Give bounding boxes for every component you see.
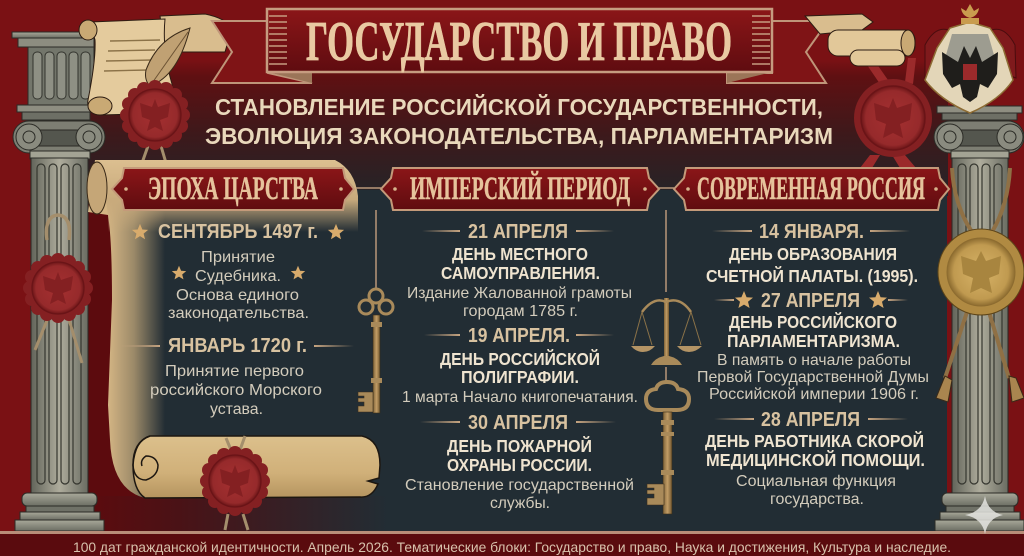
column 3 text: Современная Россия: 28 АПРЕЛЯ xyxy=(761,409,860,431)
column 2 text: Имперский период: 30 АПРЕЛЯ xyxy=(468,412,568,434)
column 3 text: Современная Россия: ДЕНЬ РАБОТНИКА СКОРОЙ xyxy=(705,430,924,451)
column 3 text: Современная Россия: 14 ЯНВАРЯ. xyxy=(759,221,864,243)
column 2 text: Имперский период xyxy=(402,221,638,512)
column 2 text: Имперский период: Становление государственной xyxy=(405,477,634,494)
seal on left column xyxy=(23,215,93,363)
footer strip xyxy=(0,531,1024,556)
column 1 text: Эпоха царства: Принятие первого xyxy=(165,363,304,380)
icon: sparkle watermark xyxy=(965,496,1003,534)
title ribbon xyxy=(212,9,828,83)
section banner: Эпоха царства xyxy=(112,168,354,210)
icon: scales of justice xyxy=(631,298,702,365)
wax seal right xyxy=(854,79,932,157)
footer strip: 100 дат гражданской идентичности. Апрель 2026. Тематические блоки: Государство и право, Наука и достижения, Культура и наследие. xyxy=(73,539,951,555)
wax seal on roll xyxy=(200,446,270,516)
column 2 text: Имперский период: САМОУПРАВЛЕНИЯ. xyxy=(441,263,600,283)
section banner: Имперский период xyxy=(381,168,659,210)
column 3 text: Современная Россия: ПАРЛАМЕНТАРИЗМА. xyxy=(727,331,900,351)
column 2 text: Имперский период: ДЕНЬ МЕСТНОГО xyxy=(452,244,588,264)
right column xyxy=(934,106,1024,532)
column 1 text: Эпоха царства: устава. xyxy=(210,401,263,418)
column 3 text: Современная Россия: МЕДИЦИНСКОЙ ПОМОЩИ. xyxy=(706,449,925,470)
top-left parchment with feather xyxy=(79,14,232,115)
section banner: Современная Россия xyxy=(674,168,949,210)
coat of arms crest xyxy=(925,4,1016,113)
column 3 text: Современная Россия xyxy=(697,221,929,508)
section banner: Эпоха царства: ЭПОХА ЦАРСТВА xyxy=(148,171,318,207)
icon: small key xyxy=(358,289,393,413)
column 1 text: Эпоха царства: СЕНТЯБРЬ 1497 г. xyxy=(158,221,318,243)
subtitle: ЭВОЛЮЦИЯ ЗАКОНОДАТЕЛЬСТВА, ПАРЛАМЕНТАРИЗМ xyxy=(205,123,833,149)
column 3 text: Современная Россия: ДЕНЬ ОБРАЗОВАНИЯ xyxy=(729,244,897,264)
connector lines xyxy=(356,188,674,382)
column 3 text: Современная Россия: СЧЕТНОЙ ПАЛАТЫ. (1995). xyxy=(706,265,918,286)
column 3 text: Современная Россия: ДЕНЬ РОССИЙСКОГО xyxy=(729,311,897,332)
column 3 text: Современная Россия: Социальная функция xyxy=(736,473,896,490)
section banner: Имперский период: ИМПЕРСКИЙ ПЕРИОД xyxy=(410,170,630,207)
title: ГОСУДАРСТВО И ПРАВО xyxy=(306,11,732,73)
column 2 text: Имперский период: 19 АПРЕЛЯ. xyxy=(468,325,570,347)
column 1 text: Эпоха царства: Судебника. xyxy=(195,268,281,285)
rope and tassels on right column xyxy=(936,168,1024,402)
column 3 text: Современная Россия: Российской империи 1906 г. xyxy=(709,386,919,403)
seal cords and wax seal top-left xyxy=(120,80,190,163)
column 2 text: Имперский период: ОХРАНЫ РОССИИ. xyxy=(447,455,592,475)
left column xyxy=(12,32,105,531)
column 2 text: Имперский период: 21 АПРЕЛЯ xyxy=(468,221,568,243)
column 2 text: Имперский период: ДЕНЬ РОССИЙСКОЙ xyxy=(440,348,600,369)
column 2 text: Имперский период: службы. xyxy=(490,495,550,512)
lower parchment roll xyxy=(133,436,380,530)
column 1 text: Эпоха царства xyxy=(120,221,354,418)
column 1 text: Эпоха царства: Основа единого xyxy=(176,287,299,304)
gold wax seal xyxy=(938,229,1024,315)
column 3 text: Современная Россия: 27 АПРЕЛЯ xyxy=(761,290,860,312)
column 2 text: Имперский период: ПОЛИГРАФИИ. xyxy=(461,367,579,387)
column 2 text: Имперский период: ДЕНЬ ПОЖАРНОЙ xyxy=(447,435,592,456)
column 2 text: Имперский период: 1 марта Начало книгопечатания. xyxy=(402,389,638,406)
parchment panel xyxy=(87,160,358,498)
column 3 text: Современная Россия: Первой Государственной Думы xyxy=(697,369,929,386)
column 1 text: Эпоха царства: законодательства. xyxy=(168,305,309,322)
top-right rolled scrolls and ribbons xyxy=(805,14,916,168)
column 1 text: Эпоха царства: российского Морского xyxy=(150,382,322,399)
column 2 text: Имперский период: Издание Жалованной грамоты xyxy=(407,285,632,302)
subtitle: СТАНОВЛЕНИЕ РОССИЙСКОЙ ГОСУДАРСТВЕННОСТИ, xyxy=(215,93,823,120)
column 1 text: Эпоха царства: Принятие xyxy=(201,249,275,266)
column 1 text: Эпоха царства: ЯНВАРЬ 1720 г. xyxy=(168,335,307,357)
subtitle xyxy=(205,93,833,149)
icon: large key xyxy=(646,382,689,514)
column 3 text: Современная Россия: В память о начале работы xyxy=(717,352,911,369)
column 3 text: Современная Россия: государства. xyxy=(770,491,864,508)
column 2 text: Имперский период: городам 1785 г. xyxy=(463,303,578,320)
